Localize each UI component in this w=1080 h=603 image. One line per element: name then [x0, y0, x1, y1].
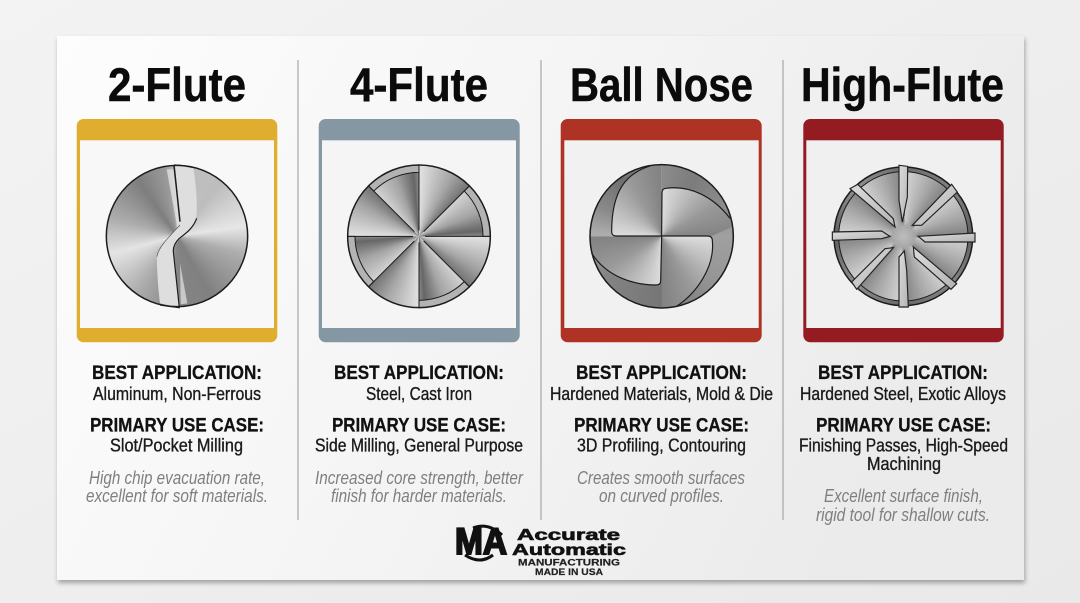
icon: 4-flute end mill [346, 163, 492, 310]
logo: Accurate Automatic Manufacturing: Automatic [512, 542, 626, 559]
text: 2-Flute details: Aluminum, Non-Ferrous [93, 384, 261, 404]
text: Ball Nose details: BEST APPLICATION: [576, 362, 747, 384]
text: High-Flute details: Hardened Steel, Exotic Alloys [800, 384, 1006, 404]
panel: High-Flute [799, 58, 1008, 525]
text: 4-Flute details: Increased core strength, better [315, 468, 524, 488]
text: 4-Flute details [315, 362, 524, 506]
logo: Accurate Automatic Manufacturing: Accurate [517, 527, 621, 544]
text: 2-Flute details: High chip evacuation rate, [89, 468, 265, 488]
icon: high-flute end mill [832, 165, 975, 307]
logo: Accurate Automatic Manufacturing [455, 521, 626, 578]
frame: 2-Flute [77, 119, 277, 342]
frame: Ball Nose [561, 119, 762, 342]
heading: 2-Flute: 2-Flute [108, 58, 246, 111]
panel: 2-Flute [77, 58, 277, 506]
column dividers [298, 60, 783, 520]
text: High-Flute details: rigid tool for shallow cuts. [816, 505, 990, 525]
text: Ball Nose details: Creates smooth surfaces [577, 468, 745, 488]
text: Ball Nose details [550, 362, 773, 506]
frame: High-Flute [803, 119, 1004, 342]
text: High-Flute details: Machining [867, 454, 941, 474]
heading: 4-Flute: 4-Flute [350, 58, 488, 111]
text: 4-Flute details: Side Milling, General Purpose [315, 436, 523, 456]
logo: Accurate Automatic Manufacturing: MADE IN USA [535, 567, 603, 578]
heading: High-Flute: High-Flute [801, 58, 1004, 111]
text: High-Flute details: Excellent surface finish, [824, 486, 983, 506]
heading: Ball Nose: Ball Nose [570, 58, 753, 111]
text: Ball Nose details: PRIMARY USE CASE: [574, 414, 749, 436]
text: 4-Flute details: finish for harder materials. [331, 486, 507, 506]
text: 2-Flute details: BEST APPLICATION: [92, 362, 262, 384]
text: 4-Flute details: BEST APPLICATION: [334, 362, 504, 384]
text: 2-Flute details: excellent for soft materials. [86, 486, 268, 506]
text: 2-Flute details [86, 362, 268, 506]
icon: 2-flute end mill [103, 163, 251, 309]
panel: 4-Flute [315, 58, 524, 506]
frame: 4-Flute [319, 119, 520, 342]
logo: Accurate Automatic Manufacturing: MANUFACTURING [518, 558, 620, 568]
text: High-Flute details: BEST APPLICATION: [818, 362, 988, 384]
text: 4-Flute details: Steel, Cast Iron [366, 384, 472, 404]
text: Ball Nose details: 3D Profiling, Contouring [577, 436, 746, 456]
panel: Ball Nose [550, 58, 773, 506]
text: High-Flute details [799, 362, 1008, 525]
text: Ball Nose details: Hardened Materials, Mold & Die [550, 384, 773, 404]
text: Ball Nose details: on curved profiles. [599, 486, 724, 506]
text: 4-Flute details: PRIMARY USE CASE: [332, 414, 506, 436]
text: 2-Flute details: PRIMARY USE CASE: [90, 414, 264, 436]
icon: ball nose end mill [588, 163, 735, 310]
text: High-Flute details: PRIMARY USE CASE: [816, 414, 991, 436]
text: 2-Flute details: Slot/Pocket Milling [110, 436, 243, 456]
icon: logo mark: MA [455, 521, 507, 562]
text: High-Flute details: Finishing Passes, High-Speed [799, 436, 1008, 456]
